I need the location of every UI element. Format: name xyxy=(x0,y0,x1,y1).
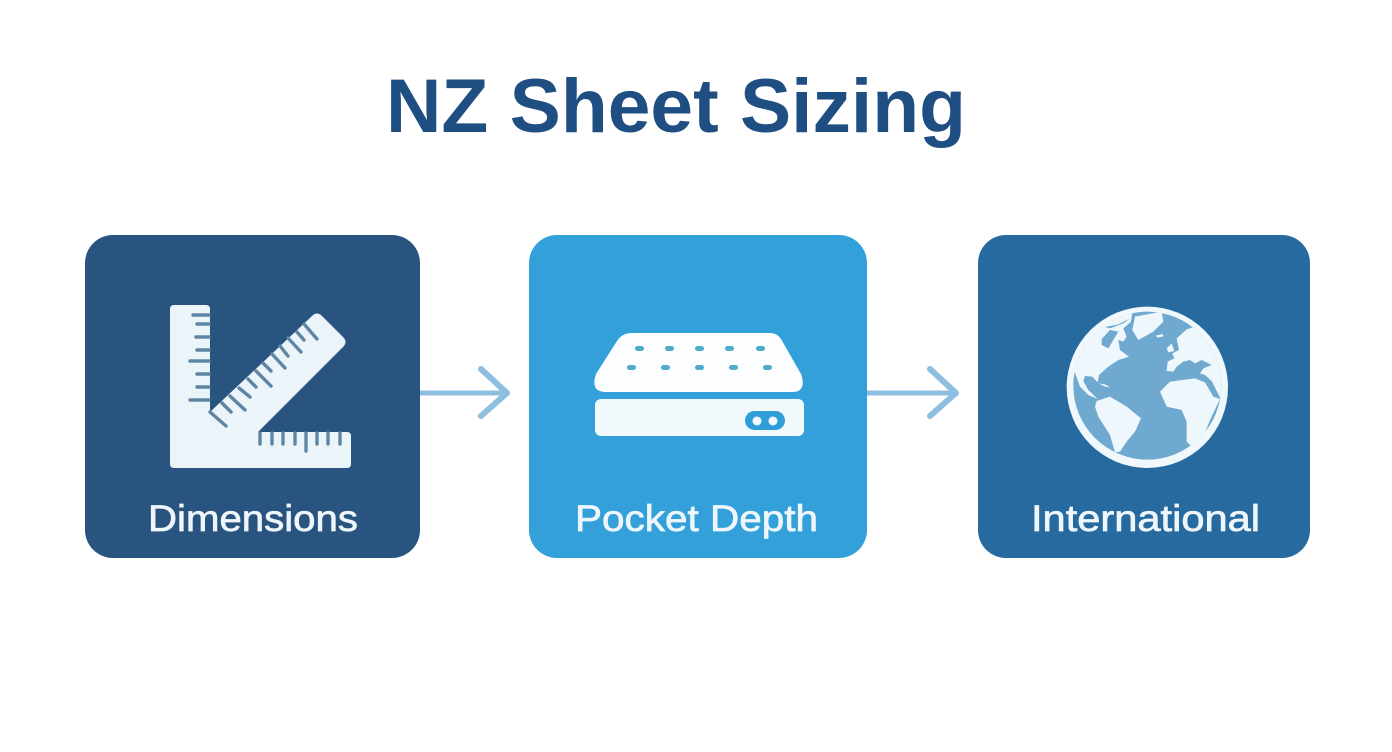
panel: international xyxy=(978,235,1310,558)
title: NZ Sheet Sizing xyxy=(386,64,966,149)
icon: mattress xyxy=(594,333,804,436)
panel: dimensions xyxy=(85,235,420,558)
panel: pocket depth xyxy=(529,235,867,558)
arrow: pocket depth to international xyxy=(862,369,956,416)
arrow: dimensions to pocket depth xyxy=(415,369,507,416)
icon: rulers xyxy=(170,305,351,468)
label: dimensions: Dimensions xyxy=(148,498,358,539)
label: pocket depth: Pocket Depth xyxy=(575,498,818,539)
label: international: International xyxy=(1031,498,1260,539)
icon: globe xyxy=(1067,307,1228,468)
